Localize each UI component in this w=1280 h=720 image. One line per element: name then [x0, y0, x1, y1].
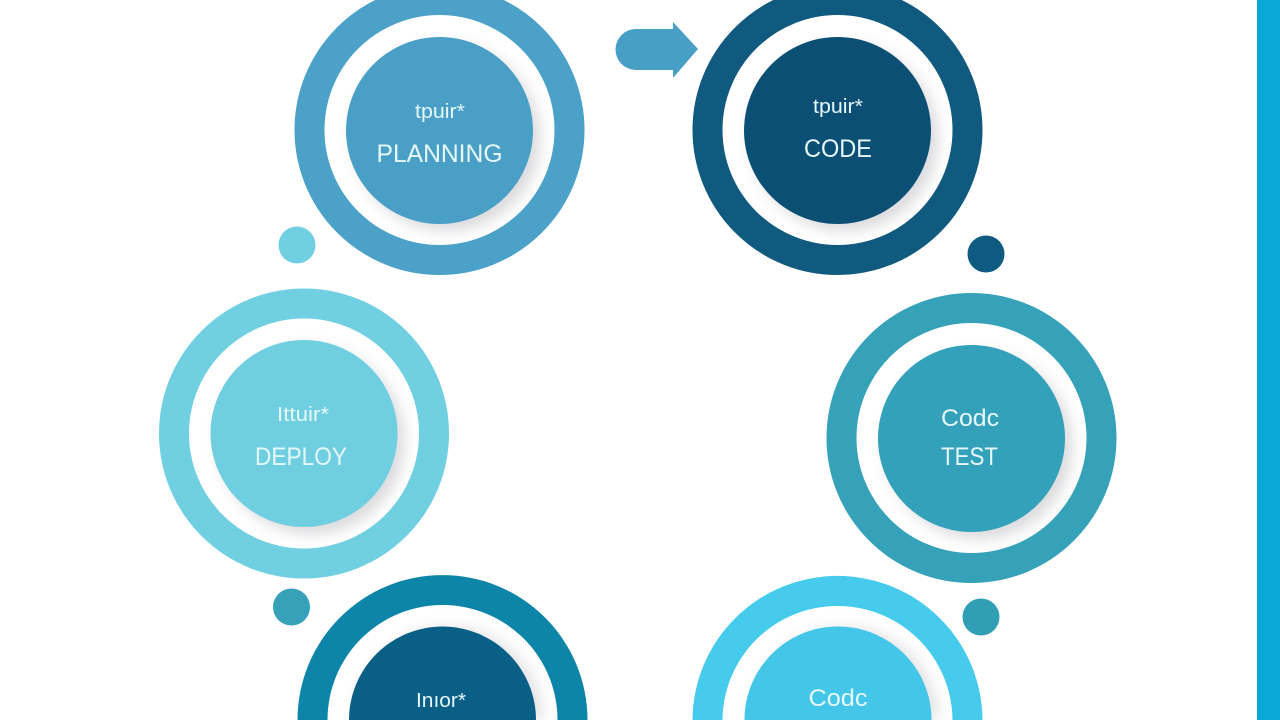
node: test	[842, 308, 1102, 568]
small label: tpuir*	[813, 96, 863, 118]
small label: Codc	[808, 685, 868, 712]
step name: TEST	[941, 443, 998, 471]
small label: Inıor*	[416, 690, 466, 712]
connector dot: test to next step	[962, 598, 1000, 636]
step name: PLANNING	[376, 140, 502, 168]
side bar	[1257, 0, 1280, 720]
node: code	[708, 0, 968, 260]
node: deploy	[174, 304, 434, 564]
node: bottom right	[693, 576, 982, 720]
connector dot: bottom left to deploy	[273, 588, 310, 626]
step name: DEPLOY	[255, 443, 347, 471]
arrow: planning to code	[616, 22, 698, 78]
node: bottom left	[298, 575, 588, 720]
node: planning	[310, 0, 570, 260]
small label: Ittuir*	[277, 404, 329, 426]
small label: Codc	[941, 405, 999, 432]
connector dot: deploy to planning	[278, 226, 316, 264]
step name: CODE	[804, 135, 872, 163]
connector dot: code to test	[968, 236, 1004, 272]
small label: tpuir*	[415, 101, 465, 123]
